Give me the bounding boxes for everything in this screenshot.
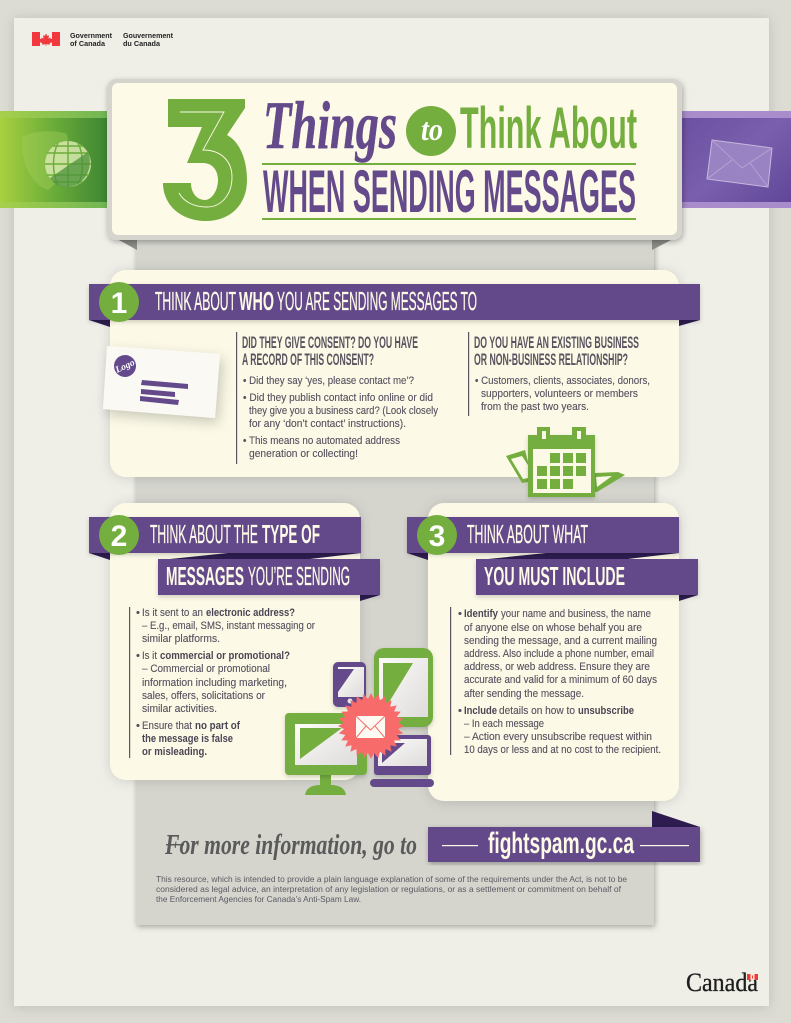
column: consent: A RECORD OF THIS CONSENT? [242,350,374,369]
ribbon: fightspam.gc.ca: fightspam.gc.ca [488,827,634,860]
panel 2 body text: – E.g., email, SMS, instant messaging or [142,620,315,632]
panel 3 body text: of anyone else on whose behalf you are [464,622,642,634]
heading: Think About: Think About [460,96,637,161]
legal disclaimer: considered as legal advice, an interpretation of any legislation or regulations, or as a settlement or commitment on behalf of [156,884,622,894]
purple envelope banner [682,111,791,208]
panel 2 body text: the message is false [142,733,233,745]
Government of Canada signature: Gouvernement [123,31,173,40]
ribbon 3 [407,517,698,601]
ribbon 3: YOU MUST INCLUDE [484,561,625,591]
icon: connected devices [285,648,434,795]
panel 3 body text: 10 days or less and at no cost to the recipient. [464,744,661,756]
column: consent: generation or collecting! [249,448,358,460]
grey centre column [136,236,654,925]
Government of Canada signature [32,31,173,48]
icon: calendars [506,427,625,497]
ribbon 1: THINK ABOUT [155,286,236,316]
legal disclaimer: the Enforcement Agencies for Canada’s Anti-Spam Law. [156,894,361,904]
Canada wordmark: Canadä [686,968,758,997]
panel 2 body text: Is it sent to an [142,607,203,619]
panel 2 body text: sales, offers, solicitations or [142,690,265,702]
panel 3 body text [450,607,661,756]
panel 2 body text: no part of [195,720,240,732]
panel 3 body text: • [458,608,462,620]
panel 2 body text: • [136,607,140,619]
panel 3 body text: Include [464,705,497,717]
panel 3 body text: Identify [464,608,499,620]
ribbon 1 [89,284,700,327]
heading: Things: Things [263,87,397,163]
column: consent: for any ‘don’t contact’ instructions). [249,418,406,430]
ribbon 2 [89,517,380,601]
panel 2 body text: information including marketing, [142,677,287,689]
number badge 2 [99,515,139,555]
panel 2 body text: similar platforms. [142,633,220,645]
column: relationship: • Customers, clients, associates, donors, [475,375,650,387]
icon: addressed envelope [103,346,220,418]
column: consent: DID THEY GIVE CONSENT? DO YOU HAVE [242,333,418,352]
panel 3 body text: address, or web address. Ensure they are [464,661,650,673]
panel 2 body text: similar activities. [142,703,217,715]
number badge 3: 3 [429,520,445,553]
icon: phone [333,662,366,707]
panel 2 body text: Ensure that [142,720,193,732]
column: relationship: DO YOU HAVE AN EXISTING BUSINESS [474,333,639,352]
panel 2 body text [129,607,315,758]
column: consent: • Did they publish contact info online or did [243,392,433,404]
badge: to: to [421,111,443,147]
panel 3 body text: unsubscribe [578,705,634,717]
ribbon 3: THINK ABOUT WHAT [467,519,588,549]
panel 3 body text: after sending the message. [464,688,584,700]
ribbon 2: THINK ABOUT THE [150,519,258,549]
panel 3 body text: – In each message [464,718,544,730]
icon: addressed envelope: Logo [113,358,137,376]
number badge 3 [417,515,457,555]
column: relationship [468,332,650,416]
icon: tablet [374,648,433,727]
Government of Canada signature: of Canada [70,39,106,48]
column: consent: they give you a business card? (Look closely [249,405,438,417]
number badge 1: 1 [111,287,127,320]
panel 2 body text: electronic address? [206,607,295,619]
ribbon 2: MESSAGES [166,561,244,591]
badge: to [406,106,456,156]
legal disclaimer: This resource, which is intended to provide a plain language explanation of some of the requirements under the Act, is not to be [156,874,627,884]
panel 2 body text: commercial or promotional? [160,650,290,662]
text: for more information: For more information, go to [164,829,417,861]
column: relationship: supporters, volunteers or members [481,388,638,400]
panel 3 body text: accurate and valid for a minimum of 60 days [464,674,657,686]
number badge 2: 2 [111,520,127,553]
big numeral 3 [163,99,247,221]
ribbon 2: TYPE OF [262,519,320,549]
panel 3 body text: • [458,705,462,717]
Government of Canada signature: Government [70,31,112,40]
column: consent [236,332,438,464]
ribbon 2: YOU’RE SENDING [248,561,350,591]
panel 3 body text: address. Also include a phone number, email [464,648,654,660]
panel 2 body text: • [136,650,140,662]
panel 3 body text: sending the message, and a current mailing [464,635,657,647]
panel 2 body text: • [136,720,140,732]
panel 3: what you must include [407,503,698,801]
icon: laptop [370,735,434,787]
legal disclaimer [156,874,627,904]
panel 2: type of messages [89,503,380,780]
icon: email starburst [334,689,408,763]
column: relationship: OR NON-BUSINESS RELATIONSHIP? [474,350,628,369]
Government of Canada signature: du Canada [123,39,161,48]
panel 2 body text: or misleading. [142,746,207,758]
ribbon 1: YOU ARE SENDING MESSAGES TO [277,286,477,316]
panel 3 body text: details on how to [499,705,575,717]
icon: desktop monitor [285,713,367,795]
ribbon: fightspam.gc.ca [428,811,700,862]
column: consent: • Did they say ‘yes, please contact me’? [243,375,414,387]
title panel [107,79,682,250]
green globe banner [0,111,108,208]
panel 2 body text: – Commercial or promotional [142,663,270,675]
number badge 1 [99,282,139,322]
ribbon 1: WHO [239,286,274,316]
panel 1: who you are sending to [89,270,700,497]
panel 2 body text: Is it [142,650,158,662]
column: consent: • This means no automated address [243,435,400,447]
call to action [164,811,700,862]
panel 3 body text: – Action every unsubscribe request within [464,731,652,743]
panel 3 body text: your name and business, the name [501,608,651,620]
column: relationship: from the past two years. [481,401,589,413]
